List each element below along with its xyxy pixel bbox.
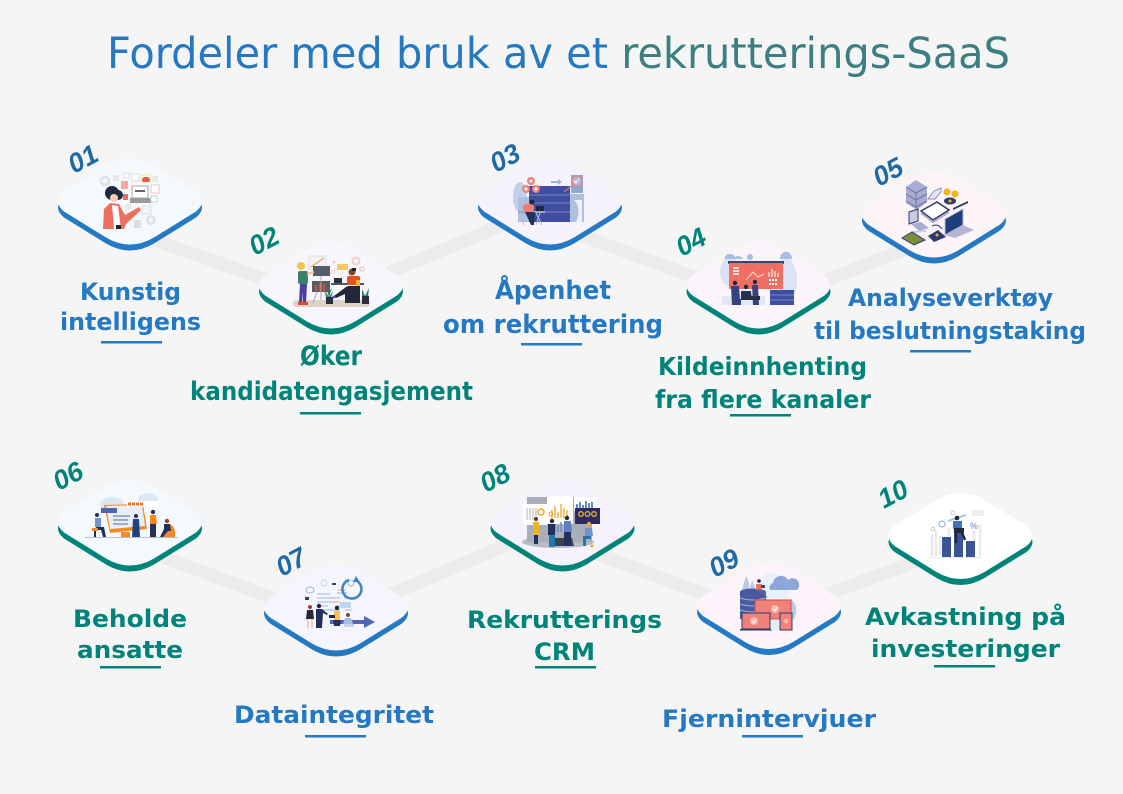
heading 10: Avkastning på: [865, 602, 1066, 631]
card 06: Beholde ansatte: [48, 455, 202, 668]
diamond 08: [490, 480, 634, 572]
icon: man on rising bar chart: [930, 510, 984, 558]
heading 10: investeringer: [871, 635, 1060, 663]
heading 08: [467, 606, 662, 666]
icon: people around monitor: [85, 493, 178, 538]
heading 06: [73, 605, 187, 664]
diamond 06: [58, 480, 202, 572]
number 06: 06: [48, 455, 89, 496]
heading 02: [190, 341, 473, 407]
card 10: Avkastning på investeringer: [865, 474, 1066, 668]
card 04: Kildeinnhenting fra flere kanaler: [655, 222, 872, 416]
icon: servers, laptop and devices: [902, 180, 974, 245]
heading 08: CRM: [534, 638, 595, 666]
diamond 01: [58, 158, 202, 250]
diamond 09: [697, 563, 841, 655]
diamond 05: [862, 172, 1006, 264]
card 09: Fjernintervjuer: [662, 543, 876, 738]
heading 05: til beslutningstaking: [814, 317, 1086, 345]
number 07: 07: [271, 541, 313, 582]
card 07: Dataintegritet: [234, 541, 434, 738]
heading 01: Kunstig: [80, 278, 181, 306]
heading 02: kandidatengasjement: [190, 377, 473, 407]
heading 01: intelligens: [60, 308, 201, 336]
heading 06: ansatte: [77, 636, 183, 664]
diamond 03: [478, 158, 622, 250]
number 08: 08: [475, 458, 515, 498]
card 03: Åpenhet om rekruttering: [443, 138, 663, 346]
number 04: 04: [671, 222, 711, 262]
heading 09: Fjernintervjuer: [662, 705, 876, 733]
heading 07: Dataintegritet: [234, 701, 434, 729]
icon: man on rising bar chart: %: [970, 521, 978, 531]
card 02: Øker kandidatengasjement: [190, 221, 473, 414]
number 05: 05: [868, 151, 909, 192]
icon: database, cloud and approved devices: [740, 573, 799, 630]
number 02: 02: [244, 221, 284, 261]
heading 06: Beholde: [73, 605, 187, 633]
icon: team at presentation board: [720, 252, 797, 305]
icon: two colleagues with flip chart: [293, 256, 370, 307]
number 01: 01: [63, 139, 103, 179]
card 08: Rekrutterings CRM: [467, 458, 662, 668]
diamond 10: [888, 493, 1032, 585]
heading 08: Rekrutterings: [467, 606, 662, 634]
title: Fordeler med bruk av et rekrutterings-SaaS: [107, 30, 1010, 79]
card 01: Kunstig intelligens: [58, 139, 202, 344]
number 09: 09: [704, 543, 744, 583]
number 03: 03: [485, 138, 525, 178]
heading 02: Øker: [300, 341, 363, 372]
heading 03: Åpenhet: [495, 274, 611, 306]
heading 03: om rekruttering: [443, 310, 663, 340]
heading 01: [60, 278, 201, 336]
heading 10: [865, 602, 1066, 663]
diamond 04: [686, 242, 830, 334]
number 10: 10: [873, 474, 913, 514]
icon: team reviewing dashboards: [522, 496, 600, 548]
icon: server stacks and candidates: [513, 175, 584, 225]
icon: team with data and arrow: [305, 576, 375, 628]
diamond 02: [259, 242, 403, 334]
heading 04: Kildeinnhenting: [658, 352, 867, 381]
icon: woman presenting with laptop: [101, 173, 159, 229]
diamond 07: [264, 564, 408, 656]
heading 04: [655, 352, 872, 414]
heading 03: [443, 274, 663, 340]
heading 05: Analyseverktøy: [848, 284, 1053, 312]
card 05: Analyseverktøy til beslutningstaking: [814, 151, 1086, 352]
heading 04: fra flere kanaler: [655, 385, 872, 414]
heading 05: [814, 284, 1086, 345]
